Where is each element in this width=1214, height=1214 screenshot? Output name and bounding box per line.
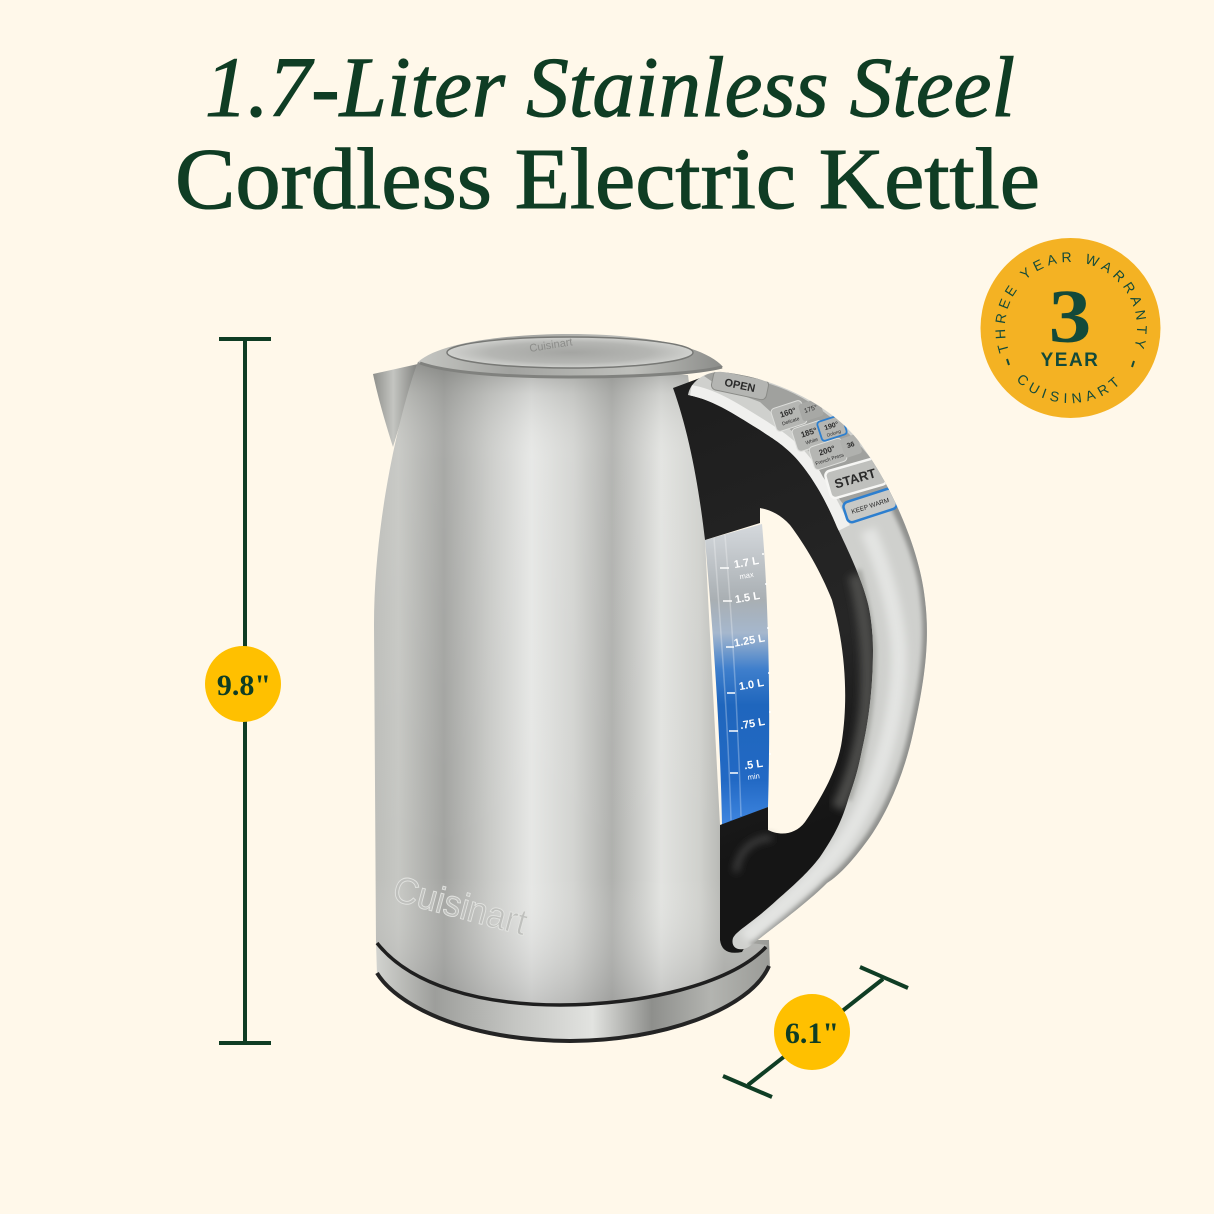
spout: [373, 364, 418, 447]
height value: 9.8": [217, 669, 271, 702]
gauge labels: .75 L: [739, 716, 766, 732]
185 white button: 185°: [800, 426, 818, 440]
black handle grip: [673, 378, 890, 953]
body shading: [374, 362, 767, 1005]
gauge labels: [733, 555, 766, 782]
190 oolong button: Oolong: [826, 428, 842, 438]
badge curved text top: THREE YEAR WARRANTY: [995, 252, 1147, 354]
title line 2: Cordless Electric Kettle: [175, 130, 1040, 227]
boil button: 36: [846, 441, 856, 450]
grip highlight: [736, 838, 772, 872]
base lower edge: [377, 966, 769, 1041]
175 green button: 175°: [803, 403, 819, 415]
open button: OPEN: [723, 377, 756, 395]
base groove: [377, 943, 766, 1005]
badge circle: [980, 238, 1160, 418]
lid disc: [447, 337, 693, 368]
height marker: [205, 646, 281, 722]
rim shadow edge: [420, 363, 722, 377]
190 oolong button: [817, 414, 847, 442]
gauge labels: max: [739, 570, 755, 581]
water window: [705, 524, 771, 825]
window streaks: [714, 535, 741, 820]
handle inner edge shading: [848, 570, 873, 800]
190 oolong button: 190°: [823, 420, 840, 432]
lid rim: [418, 334, 723, 378]
start button: START: [833, 465, 878, 492]
silver handle inner highlight: [690, 396, 840, 530]
control buttons: [711, 369, 898, 523]
keep warm button: KEEP WARM: [851, 497, 890, 516]
200 french press button: [808, 437, 848, 471]
175 green button: [798, 400, 823, 421]
gauge labels: 1.7 L: [733, 555, 760, 571]
width line: [723, 967, 908, 1097]
base ring: [376, 940, 770, 1043]
lid logo: Cuisinart: [529, 336, 573, 355]
185 white button: [791, 420, 829, 452]
height line: [219, 339, 271, 1043]
gauge labels: .5 L: [743, 758, 764, 772]
handle outer edge shading: [752, 480, 927, 945]
160 delicate button: Delicate: [781, 416, 801, 427]
badge year: YEAR: [1041, 350, 1099, 371]
start button: [824, 456, 888, 499]
badge curved text bottom: CUISINART: [1018, 375, 1118, 404]
title line 1: 1.7-Liter Stainless Steel: [205, 39, 1015, 135]
gauge labels: 1.25 L: [733, 632, 766, 650]
160 delicate button: 160°: [779, 406, 797, 420]
gauge labels: 1.0 L: [738, 677, 765, 693]
handle centre highlight: [745, 530, 899, 938]
200 french press button: French Press: [815, 452, 845, 467]
height dimension: [205, 339, 281, 1043]
keep warm button: [842, 487, 898, 523]
embossed logo: Cuisinart: [389, 868, 533, 943]
200 french press button: 200°: [818, 444, 836, 458]
grip sheen: [838, 575, 868, 808]
width dimension: [723, 967, 908, 1097]
gauge labels: min: [747, 771, 760, 782]
handle controls: [690, 369, 927, 945]
gauge labels: 1.5 L: [734, 590, 761, 606]
badge number: 3: [1049, 275, 1091, 359]
185 white button: White: [805, 437, 819, 447]
warranty badge: [980, 238, 1160, 418]
gauge ticks: [720, 554, 771, 773]
open button: [711, 372, 769, 400]
title: [175, 39, 1040, 227]
kettle body: [374, 362, 767, 1005]
kettle: [373, 334, 927, 1043]
width marker: [774, 994, 850, 1070]
width value: 6.1": [785, 1017, 839, 1050]
control panel band: [704, 372, 895, 508]
boil button: [840, 434, 862, 458]
160 delicate button: [770, 400, 808, 432]
badge dashes: [1007, 359, 1134, 367]
window glass: [705, 524, 769, 825]
silver handle: [688, 372, 927, 949]
